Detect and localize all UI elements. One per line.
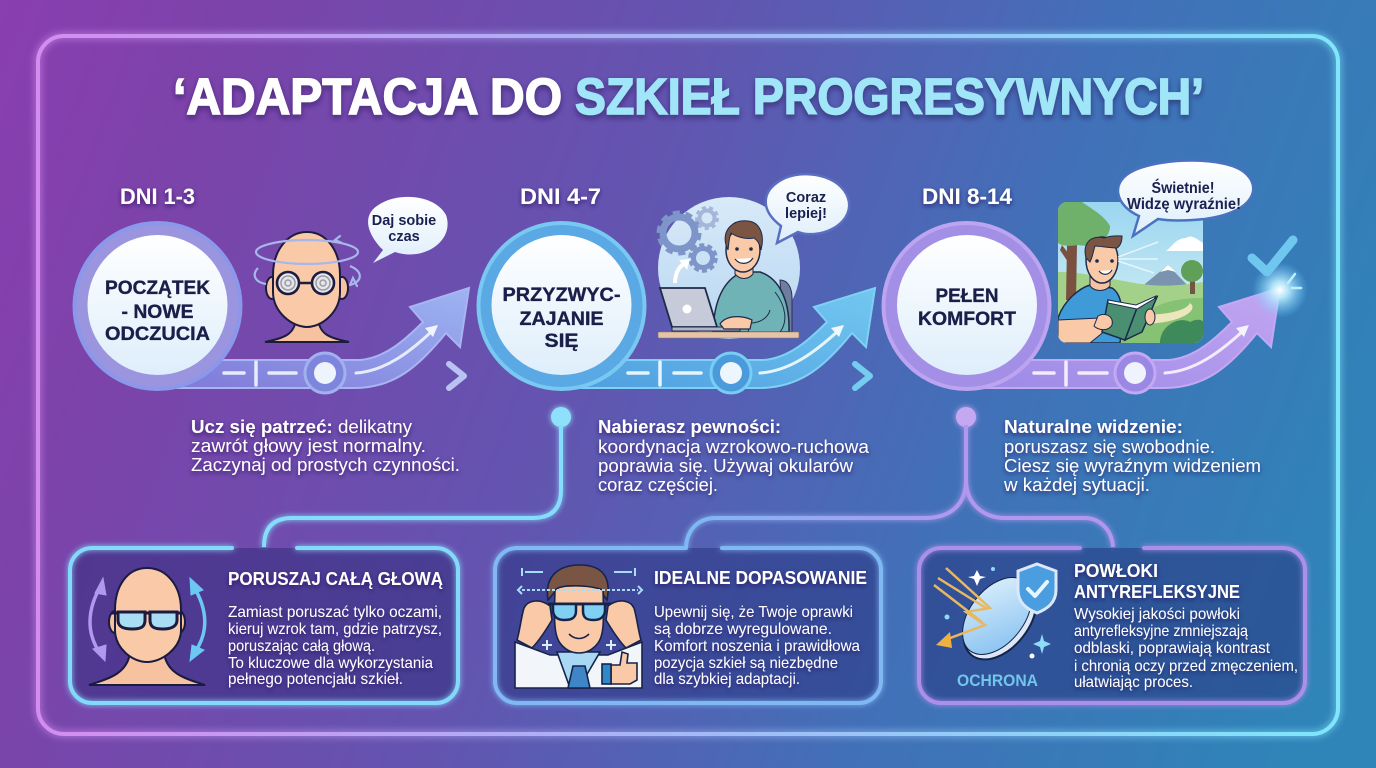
stage 2 description: Nabierasz pewności: — [598, 416, 781, 437]
stage 3 circle text: KOMFORT — [918, 308, 1016, 330]
stage 2 label: DNI 4-7 — [520, 184, 601, 209]
scene: man at laptop — [658, 197, 800, 339]
speech bubble 2: Coraz — [786, 190, 826, 206]
stage 1 circle text: POCZĄTEK — [105, 277, 210, 299]
stage 2 track marks — [628, 331, 838, 385]
card 2 text — [654, 604, 860, 688]
card 1 text: pełnego potencjału szkieł. — [228, 671, 403, 688]
card 3 text: Wysokiej jakości powłoki — [1074, 606, 1240, 623]
card 3 text: i chronią oczy przed zmęczeniem, — [1074, 658, 1298, 675]
card 3 text: antyrefleksyjne zmniejszają — [1074, 623, 1248, 640]
icon: rotation arrows — [90, 578, 205, 661]
stage 3 node — [1115, 353, 1155, 393]
card 2 text: pozycja szkieł są niezbędne — [654, 655, 838, 672]
connector: stage 3 to cards 2 and 3 — [686, 407, 1113, 547]
stage 3 arrow track — [969, 288, 1280, 388]
card 3 text — [1074, 606, 1298, 691]
card 1 text: To kluczowe dla wykorzystania — [228, 655, 433, 672]
card 3 heading: POWŁOKI — [1074, 560, 1158, 581]
card 3 fill — [919, 548, 1305, 703]
speech bubble 2 — [766, 174, 849, 243]
spark glow — [1252, 262, 1308, 318]
stage 1 description: Ucz się patrzeć: delikatny — [191, 416, 413, 437]
stage 3 label: DNI 8-14 — [922, 184, 1013, 209]
card 2 text: Komfort noszenia i prawidłowa — [654, 638, 860, 655]
card 2 heading: IDEALNE DOPASOWANIE — [654, 567, 867, 588]
stage 2 description: coraz częściej. — [598, 474, 718, 495]
stage 3 circle — [884, 223, 1050, 389]
stage 2 circle text: SIĘ — [544, 330, 578, 352]
stage 2 circle — [478, 223, 644, 389]
icon: dizzy head — [265, 232, 349, 342]
card 1 text: Zamiast poruszać tylko oczami, — [228, 604, 442, 621]
stage 1 circle — [74, 223, 240, 389]
card 3: anti-reflective coating — [919, 548, 1305, 703]
check mark — [1252, 240, 1301, 288]
icon: dizzy orbits — [255, 236, 360, 286]
stage 2 arrow track — [564, 288, 875, 388]
stage 3 circle text: PEŁEN — [936, 285, 998, 307]
stage 2 streak tip — [831, 325, 844, 337]
speech bubble 1 — [368, 197, 448, 263]
speech bubble 2: lepiej! — [785, 206, 827, 222]
stage 3 circle text — [918, 285, 1016, 330]
stage 2 circle text: ZAJANIE — [520, 308, 604, 330]
torso — [713, 272, 789, 332]
stage 2 circle text — [502, 284, 620, 352]
card 1 border — [70, 548, 458, 703]
stage 1 panel — [74, 184, 469, 475]
stage 3 description: w każdej sytuacji. — [1003, 474, 1150, 495]
card 3 heading — [1074, 560, 1240, 602]
chair — [780, 280, 792, 332]
stage 1 arrow track — [160, 288, 469, 388]
stage 3 streak tip — [1236, 325, 1249, 337]
stage 3 description — [1003, 416, 1261, 495]
stage 3 track marks — [1034, 331, 1243, 385]
stage 1 description — [191, 416, 460, 475]
stage 3 panel — [884, 160, 1308, 495]
title: ‘ADAPTACJA DO — [173, 68, 562, 125]
stage 1 circle text: - NOWE — [122, 301, 194, 323]
laptop — [660, 288, 717, 327]
speech bubble 3: Widzę wyraźnie! — [1127, 196, 1241, 213]
icon caption: OCHRONA — [957, 671, 1038, 690]
card 2 fill — [495, 548, 881, 703]
card 2 border — [495, 548, 881, 703]
card 1 fill — [70, 548, 458, 703]
stage 1 description: Zaczynaj od prostych czynności. — [191, 454, 460, 475]
card 2: fitting — [495, 548, 881, 703]
stage 2 description: koordynacja wzrokowo-ruchowa — [598, 436, 870, 457]
card 1: head movement — [70, 548, 458, 703]
icon: optician adjusting glasses — [515, 565, 642, 688]
icon: measure marks — [518, 568, 642, 650]
card 3 text: ułatwiając proces. — [1074, 674, 1193, 691]
gears — [659, 208, 718, 271]
neck and head — [735, 260, 753, 278]
title — [173, 68, 1204, 125]
stage 3 description: Ciesz się wyraźnym widzeniem — [1004, 455, 1261, 476]
stage 3 description: poruszasz się swobodnie. — [1004, 436, 1215, 457]
card 1 text: kieruj wzrok tam, gdzie patrzysz, — [228, 621, 442, 638]
icon: lens with reflection and shield — [934, 564, 1056, 673]
stage 1 circle text: ODCZUCIA — [105, 323, 210, 345]
hands — [720, 317, 752, 329]
stage 3 description: Naturalne widzenie: — [1004, 416, 1183, 437]
chevron — [449, 364, 464, 388]
card 2 text: Upewnij się, że Twoje oprawki — [654, 604, 853, 621]
stage 2 panel — [478, 174, 875, 495]
speech bubble 3: Świetnie! — [1152, 179, 1214, 197]
stage 2 node — [711, 353, 751, 393]
stage 1 node — [305, 353, 345, 393]
speech bubble 3 — [1118, 160, 1253, 236]
stage 1 streak tip — [425, 325, 438, 337]
stage 1 circle text — [105, 277, 210, 345]
card 3 border — [919, 548, 1305, 703]
card 1 heading: PORUSZAJ CAŁĄ GŁOWĄ — [228, 568, 443, 589]
desk — [658, 332, 799, 338]
chevron — [855, 364, 870, 388]
card 1 text — [228, 604, 442, 688]
title: SZKIEŁ PROGRESYWNYCH’ — [575, 68, 1204, 125]
card 3 text: odblaski, poprawiają kontrast — [1074, 640, 1271, 657]
card 2 text: dla szybkiej adaptacji. — [654, 671, 800, 688]
card 3 heading: ANTYREFLEKSYJNE — [1074, 581, 1240, 602]
stage 1 label: DNI 1-3 — [120, 184, 195, 209]
speech bubble 1: czas — [388, 229, 420, 245]
connector: stage 2 to card 1 — [264, 407, 571, 547]
stage 1 description: zawrót głowy jest normalny. — [191, 435, 426, 456]
stage 2 description — [598, 416, 870, 495]
stage 1 track marks — [224, 331, 432, 385]
card 2 text: są dobrze wyregulowane. — [654, 621, 832, 638]
stage 2 description: poprawia się. Używaj okularów — [598, 455, 854, 476]
scene: man reading in landscape — [1058, 202, 1203, 343]
arm — [748, 292, 785, 332]
speech bubble 1: Daj sobie — [372, 213, 436, 229]
stage 2 circle text: PRZYZWYC- — [502, 284, 620, 306]
card 1 text: poruszając całą głową. — [228, 638, 375, 655]
icon: bald head with glasses — [89, 568, 205, 685]
